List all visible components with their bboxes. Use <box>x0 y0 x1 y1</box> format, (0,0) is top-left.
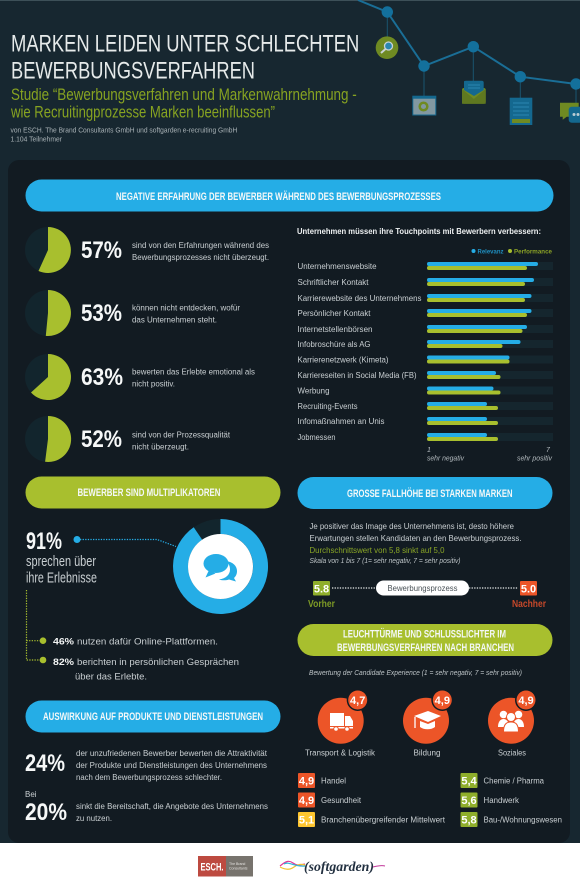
donut chart 91% <box>173 519 268 614</box>
stat 20% <box>25 790 268 826</box>
heading: Auswirkung <box>26 700 280 732</box>
bar chart: touchpoints: Karrierenetzwerk (Kimeta) <box>298 356 389 364</box>
stat 52% <box>81 426 231 453</box>
list: low-ranked industries: 4,9 <box>299 795 314 807</box>
stat 91%: 91% <box>26 528 62 555</box>
logo: softgarden <box>280 860 385 875</box>
text: Image: Skala von 1 bis 7 (1= sehr negativ, 7 = sehr positiv) <box>310 558 460 565</box>
stat 53%: können nicht entdecken, wofür <box>132 304 240 312</box>
text: 82% <box>53 657 239 682</box>
bar chart: touchpoints: sehr negativ <box>427 456 464 462</box>
stat 63%: nicht positiv. <box>132 380 175 388</box>
main panel <box>8 160 570 843</box>
logo: ESCH: ESCH. <box>200 862 224 874</box>
text: 46%: nutzen dafür Online-Plattformen. <box>77 637 218 648</box>
connector: bullets <box>26 590 46 663</box>
pie 52% <box>25 416 71 462</box>
heading: negative Erfahrung <box>26 180 554 212</box>
process scale: 5.0 <box>521 584 536 596</box>
bar chart: touchpoints: Infomaßnahmen an Unis <box>298 417 384 426</box>
stat 24%: der unzufriedenen Bewerber bewerten die Attraktivität <box>76 749 268 758</box>
title: BEWERBUNGSVERFAHREN <box>11 57 255 84</box>
list: low-ranked industries: Branchenübergreifender Mittelwert <box>321 816 446 824</box>
stat 63% <box>81 364 255 391</box>
text: 82%: über das Erlebte. <box>75 672 147 682</box>
stat 63%: bewerten das Erlebte emotional als <box>132 368 255 376</box>
heading: Fallhöhe <box>298 477 552 509</box>
icon: Transport & Logistik <box>305 689 376 758</box>
pie 63% <box>25 354 71 400</box>
list: top-ranked industries: 5,4 <box>461 776 478 788</box>
process scale: Bewerbungsprozess <box>388 584 458 593</box>
credits: 1.104 Teilnehmer <box>10 137 63 144</box>
text: Bewertung: Bewertung der Candidate Experience (1 = sehr negativ, 7 = sehr positiv) <box>309 670 522 677</box>
bar chart: touchpoints: Internetstellenbörsen <box>298 325 372 334</box>
list: top-ranked industries: 5,6 <box>461 795 477 807</box>
bar chart: touchpoints: Unternehmenswebsite <box>298 262 377 271</box>
heading: Multiplikatoren: BEWERBER SIND MULTIPLIKATOREN <box>78 487 221 499</box>
stat 57%: 57% <box>81 237 122 264</box>
credits: von ESCH. The Brand Consultants GmbH und softgarden e-recruiting GmbH <box>10 127 237 134</box>
list: low-ranked industries <box>298 773 446 827</box>
text: Image: Erwartungen stellen Kandidaten an den Bewerbungsprozess. <box>310 533 522 543</box>
icon: Bildung: 4,9 <box>435 695 450 707</box>
stat 57% <box>81 237 269 264</box>
icon: Soziales: Soziales <box>498 748 526 758</box>
text: Image <box>310 521 522 565</box>
subtitle <box>10 85 357 121</box>
process scale: 5.8 <box>314 584 329 596</box>
heading: Leuchttürme <box>298 624 552 656</box>
heading: Auswirkung: AUSWIRKUNG AUF PRODUKTE UND DIENSTLEISTUNGEN <box>43 711 263 723</box>
subtitle: Studie “Bewerbungsverfahren und Markenwahrnehmung - <box>11 85 357 104</box>
list: low-ranked industries: 5,1 <box>299 814 314 826</box>
list: top-ranked industries: Bau-/Wohnungswesen <box>484 816 562 824</box>
stat 57%: Bewerbungsprozesses nicht überzeugt. <box>132 253 269 262</box>
list: low-ranked industries: Gesundheit <box>321 796 362 805</box>
icon: Bildung <box>403 689 453 758</box>
heading: Multiplikatoren <box>26 476 280 508</box>
heading: Leuchttürme: BEWERBUNGSVERFAHREN NACH BRANCHEN <box>337 642 514 654</box>
icon: speech bubbles <box>204 554 237 582</box>
title <box>11 31 359 84</box>
process scale: Vorher <box>308 599 335 610</box>
stat 24% <box>25 749 268 782</box>
icon: Transport & Logistik: Transport & Logistik <box>305 748 376 758</box>
bar chart: touchpoints: Karrierewebsite des Unternehmens <box>298 294 422 303</box>
bar chart: touchpoints: Infobroschüre als AG <box>298 340 370 349</box>
icon: magnifier <box>376 36 398 59</box>
bar chart: touchpoints: 7 <box>546 447 551 454</box>
stat 20%: 20% <box>25 799 67 826</box>
chart heading: Unternehmen müssen ihre Touchpoints mit Bewerbern verbessern: <box>297 226 541 236</box>
chart legend: Relevanz <box>478 248 504 256</box>
stat 52%: 52% <box>81 426 122 453</box>
logo: ESCH <box>198 856 253 876</box>
stat 91%: ihre Erlebnisse <box>26 570 97 586</box>
stat 63%: 63% <box>81 364 123 391</box>
bar chart: touchpoints: Recruiting-Events <box>298 402 358 411</box>
bar chart: touchpoints: Schriftlicher Kontakt <box>298 278 369 287</box>
heading: negative Erfahrung: NEGATIVE ERFAHRUNG DER BEWERBER WÄHREND DES BEWERBUNGSPROZESSES <box>116 190 441 203</box>
list: low-ranked industries: 4,9 <box>299 776 314 788</box>
icon: Soziales <box>488 689 537 758</box>
pie 57% <box>25 227 71 273</box>
heading: Fallhöhe: GROSSE FALLHÖHE BEI STARKEN MARKEN <box>347 487 513 500</box>
stat 24%: der Produkte und Dienstleistungen des Unternehmens <box>76 761 267 770</box>
icon: Transport & Logistik: 4,7 <box>350 695 365 707</box>
stat 20%: zu nutzen. <box>76 814 112 823</box>
bar chart: touchpoints: Werbung <box>298 386 330 396</box>
header network graphic <box>358 0 580 125</box>
text: Image: Je positiver das Image des Unternehmens ist, desto höhere <box>310 521 514 531</box>
icon: document <box>510 98 532 125</box>
credits <box>10 127 237 144</box>
stat 57%: sind von den Erfahrungen während des <box>132 241 269 250</box>
process scale <box>308 580 546 610</box>
chart legend <box>472 248 552 256</box>
stat 24%: 24% <box>25 750 65 777</box>
icon: Bildung: Bildung <box>414 748 440 758</box>
icon: browser window <box>413 96 436 115</box>
text: 82%: 82% <box>53 657 75 668</box>
logo: ESCH: The Brand <box>229 862 245 866</box>
stat 53%: das Unternehmen steht. <box>132 316 217 324</box>
stat 24%: nach dem Bewerbungsprozess schlechter. <box>76 773 222 782</box>
logo: ESCH: Consultants <box>229 866 248 870</box>
icon: envelope <box>462 81 486 104</box>
process scale: Nachher <box>512 599 546 610</box>
subtitle: wie Recruitingprozesse Marken beeinflussen” <box>10 102 275 121</box>
title: MARKEN LEIDEN UNTER SCHLECHTEN <box>11 31 359 58</box>
icon: Soziales: 4,9 <box>518 695 534 707</box>
connector: 91% to donut <box>74 536 176 546</box>
bar chart: touchpoints: Jobmessen <box>298 433 336 442</box>
bar chart: touchpoints: Persönlicher Kontakt <box>298 309 371 318</box>
text: 82%: berichten in persönlichen Gesprächen <box>77 657 239 668</box>
stat 53%: 53% <box>81 300 122 327</box>
text: Image: Durchschnittswert von 5,8 sinkt auf 5,0 <box>310 545 445 555</box>
stat 52%: nicht überzeugt. <box>132 442 189 452</box>
list: top-ranked industries <box>460 773 562 827</box>
bar chart: touchpoints: 1 <box>427 447 431 454</box>
chart legend: Performance <box>514 248 552 256</box>
list: top-ranked industries: Handwerk <box>484 796 520 805</box>
stat 52%: sind von der Prozessqualität <box>132 430 231 440</box>
stat 20%: sinkt die Bereitschaft, die Angebote des Unternehmens <box>76 802 268 811</box>
list: low-ranked industries: Handel <box>321 776 346 786</box>
list: top-ranked industries: Chemie / Pharma <box>484 776 545 786</box>
stat 20%: Bei <box>25 790 37 799</box>
bar chart: touchpoints: sehr positiv <box>517 456 552 462</box>
logo: softgarden: (softgarden) <box>304 860 374 875</box>
bar chart: touchpoints: Karriereseiten in Social Media (FB) <box>298 371 417 380</box>
list: top-ranked industries: 5,8 <box>461 814 477 826</box>
text: 46%: 46% <box>53 637 75 648</box>
stat 53% <box>81 300 240 327</box>
stat 91% <box>26 528 97 586</box>
pie 53% <box>25 290 71 336</box>
bar chart: touchpoints <box>298 262 553 462</box>
heading: Leuchttürme: LEUCHTTÜRME UND SCHLUSSLICHTER IM <box>343 628 506 640</box>
icon: chat bubbles <box>560 103 580 123</box>
stat 91%: sprechen über <box>26 554 96 570</box>
